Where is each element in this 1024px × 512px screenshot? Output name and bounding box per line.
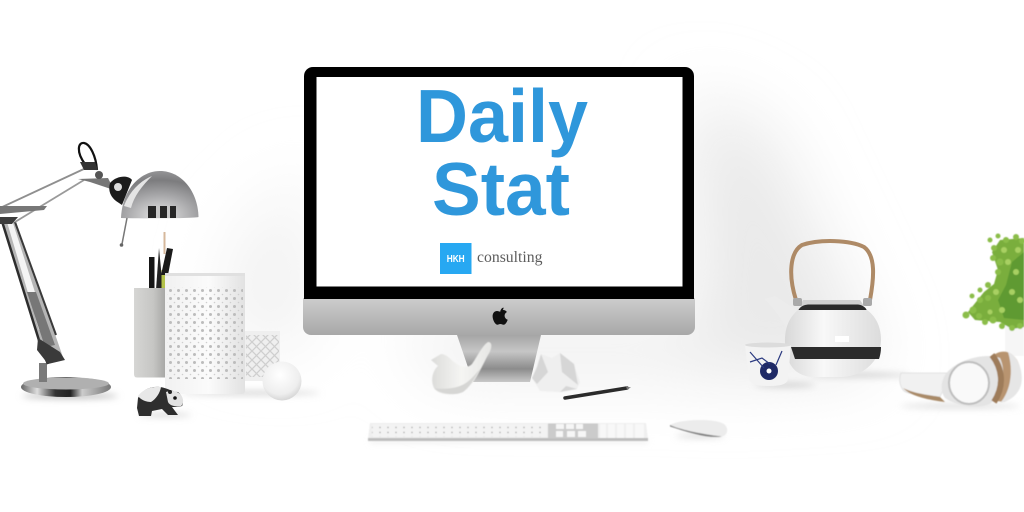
- lamp joint: [78, 178, 114, 190]
- lamp lower arm: [2, 219, 64, 364]
- wall shadows: [225, 90, 880, 380]
- white ball: [262, 362, 302, 400]
- plant pot: [1005, 326, 1024, 356]
- lamp post: [39, 363, 47, 382]
- desk lamp: [0, 143, 198, 397]
- logo initials: HKH: [447, 254, 465, 265]
- front ear cup: [942, 356, 1003, 407]
- crumpled paper: [532, 353, 580, 392]
- logo square: [440, 243, 472, 274]
- bird figurine: [431, 342, 491, 394]
- tea cup: [745, 342, 791, 386]
- monitor screen: [316, 77, 682, 286]
- teapot spout: [764, 296, 800, 345]
- teapot: [764, 241, 881, 377]
- icon: apple logo: [493, 308, 508, 325]
- monitor bezel: [304, 67, 694, 299]
- keyboard: [368, 423, 648, 441]
- pen holder: [134, 232, 302, 400]
- perforated white cup: [165, 273, 245, 394]
- lamp shade: [121, 171, 198, 218]
- lamp pull chain: [122, 218, 127, 244]
- plant: [962, 234, 1024, 356]
- rear ear cup: [990, 352, 1021, 402]
- panda figurine: [137, 387, 183, 416]
- pens: [149, 232, 173, 293]
- teapot band: [791, 347, 881, 359]
- concrete cup: [134, 288, 166, 378]
- logo: HKH consulting: [440, 243, 543, 274]
- logo wordmark: consulting: [477, 249, 543, 266]
- teapot body: [785, 310, 881, 377]
- teapot lid: [800, 300, 864, 306]
- monitor: [303, 67, 695, 382]
- small lattice cup: [245, 331, 280, 381]
- title: Stat: [432, 147, 570, 231]
- title: Daily: [416, 74, 588, 158]
- lamp cable: [79, 143, 97, 170]
- plant foliage: [962, 234, 1024, 331]
- desk shadows: [22, 373, 1020, 442]
- teapot handle: [791, 241, 873, 300]
- monitor stand: [457, 335, 541, 382]
- lamp upper arms: [0, 168, 86, 208]
- headphones: [900, 352, 1022, 407]
- pencil: [565, 386, 631, 398]
- monitor chin: [303, 298, 695, 335]
- title: [416, 74, 588, 231]
- headband: [900, 373, 950, 397]
- lamp base: [21, 377, 111, 397]
- mouse: [670, 420, 727, 437]
